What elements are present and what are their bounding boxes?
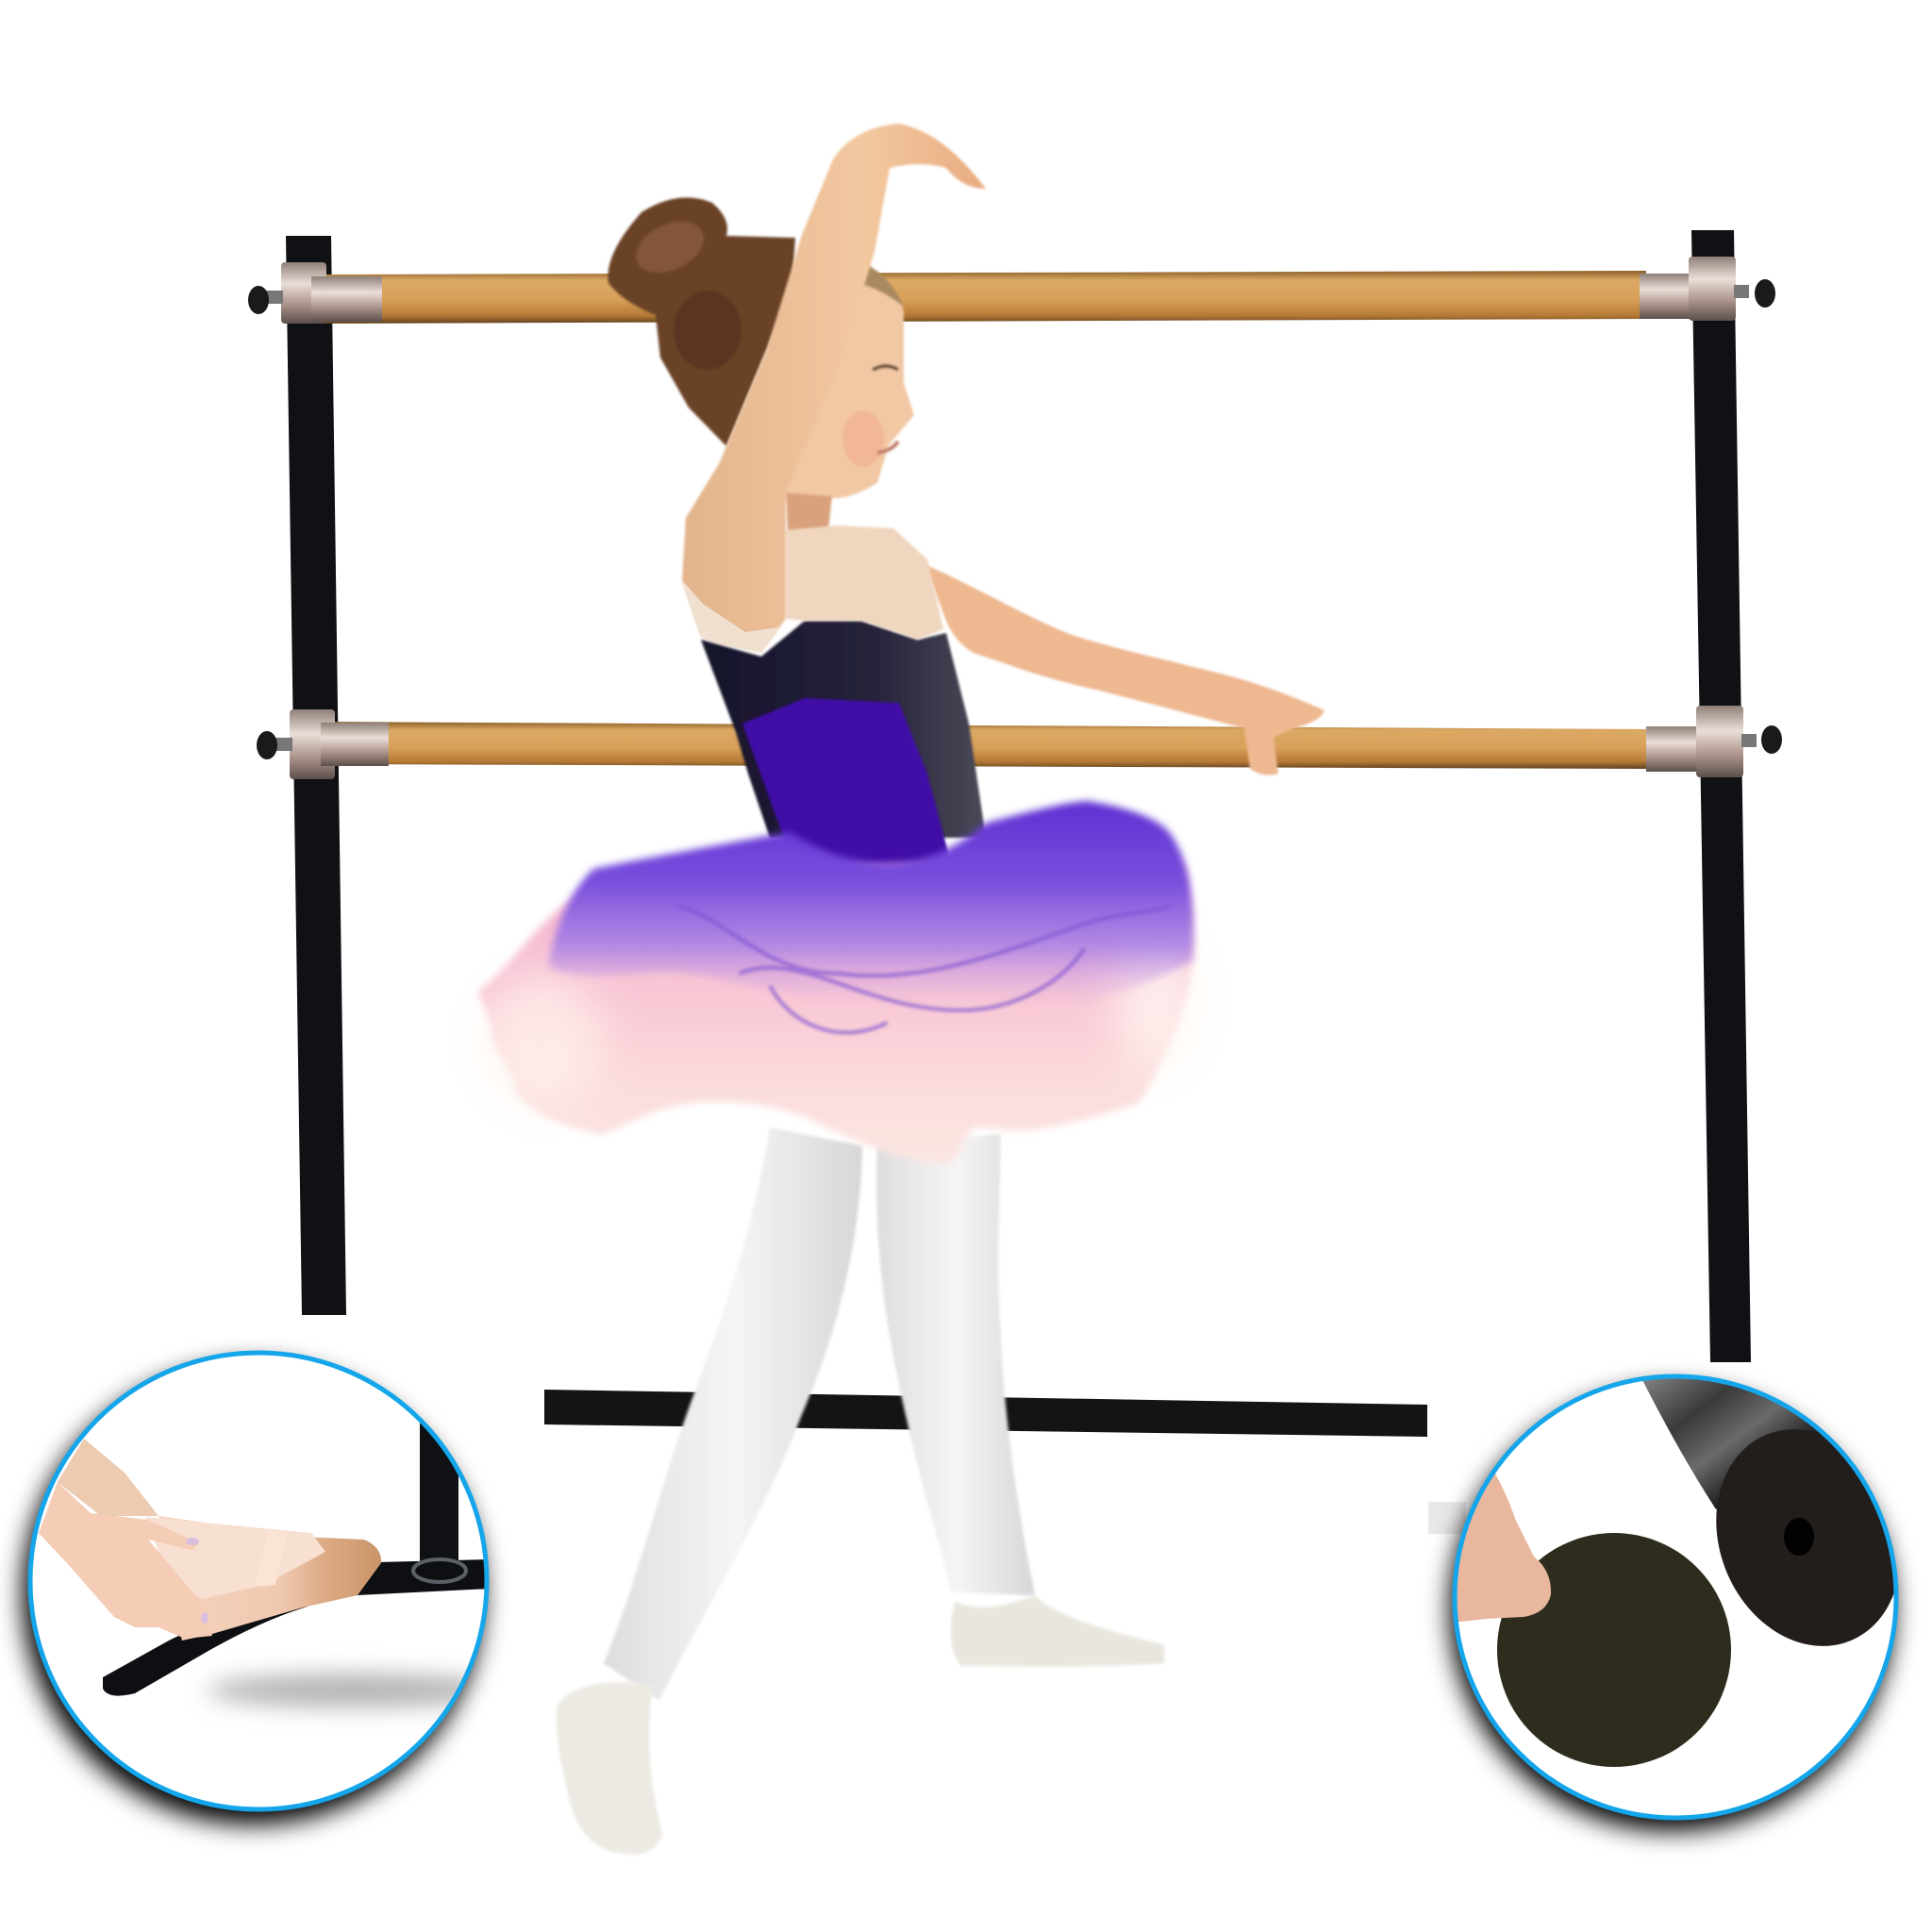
lower left clamp [257, 709, 389, 779]
ballerina [478, 124, 1324, 1855]
inset background [1454, 1375, 1897, 1819]
raised arm and shoulder sleeve [682, 124, 986, 652]
tube end disc [1685, 1401, 1932, 1674]
ballet foot sole [158, 1516, 381, 1641]
blue ring [1455, 1376, 1896, 1818]
tights: front leg [876, 1134, 1035, 1595]
face [745, 259, 914, 533]
upright post [420, 1423, 458, 1561]
left circular inset: curved base with dancer's foot [23, 1351, 500, 1824]
fingernails [186, 1538, 208, 1624]
purple leotard panel [742, 698, 955, 891]
inset background [28, 1351, 489, 1811]
eye [873, 366, 898, 370]
upper right clamp [1640, 257, 1775, 321]
right circular inset: non-slip pad and tube end [1428, 1373, 1932, 1831]
barre frame [248, 230, 1782, 1437]
tutu ruffles [677, 906, 1171, 1033]
floor shadow [208, 1674, 500, 1707]
tutu skirt purple upper layer [548, 801, 1193, 1009]
tights: back leg [604, 1127, 862, 1700]
hand and fingers [39, 1482, 212, 1639]
right upright post [1691, 230, 1751, 1362]
hair and bun [608, 197, 795, 446]
curved foot of stand [103, 1559, 491, 1696]
inset shadow [23, 1364, 483, 1824]
neck [786, 492, 832, 533]
sleeve edge [682, 580, 786, 652]
lower right clamp [1646, 706, 1782, 777]
back ballet shoe [557, 1682, 663, 1855]
inset contents [1453, 1373, 1932, 1767]
adhesive pad [1497, 1533, 1731, 1767]
left upright post [286, 236, 346, 1315]
mesh panel [146, 1517, 325, 1599]
thumb [1453, 1474, 1551, 1623]
black tube [1639, 1373, 1825, 1509]
strap [257, 1577, 277, 1587]
pale tulle highlight left [480, 974, 604, 1108]
mouth [877, 441, 898, 453]
black leotard bodice [701, 621, 986, 838]
lower calf [58, 1439, 158, 1516]
inset shadow [1450, 1388, 1893, 1831]
tutu skirt lower layer [478, 862, 1193, 1164]
post collar [413, 1559, 466, 1582]
cheek [842, 410, 884, 467]
pale tulle highlight right [1115, 918, 1201, 1078]
inset contents [39, 1415, 500, 1707]
bolt hole [1784, 1518, 1814, 1556]
extended arm and hand on lower barre [924, 564, 1324, 775]
upper wooden rail [311, 271, 1646, 324]
beige chest mesh [786, 525, 943, 640]
faint residual streak [1428, 1502, 1466, 1534]
front ballet shoe [951, 1595, 1164, 1667]
fringe [849, 259, 904, 307]
upper left clamp [248, 262, 382, 324]
blue ring [30, 1353, 487, 1809]
lower wooden rail [321, 722, 1651, 769]
floor base bar [544, 1390, 1427, 1437]
